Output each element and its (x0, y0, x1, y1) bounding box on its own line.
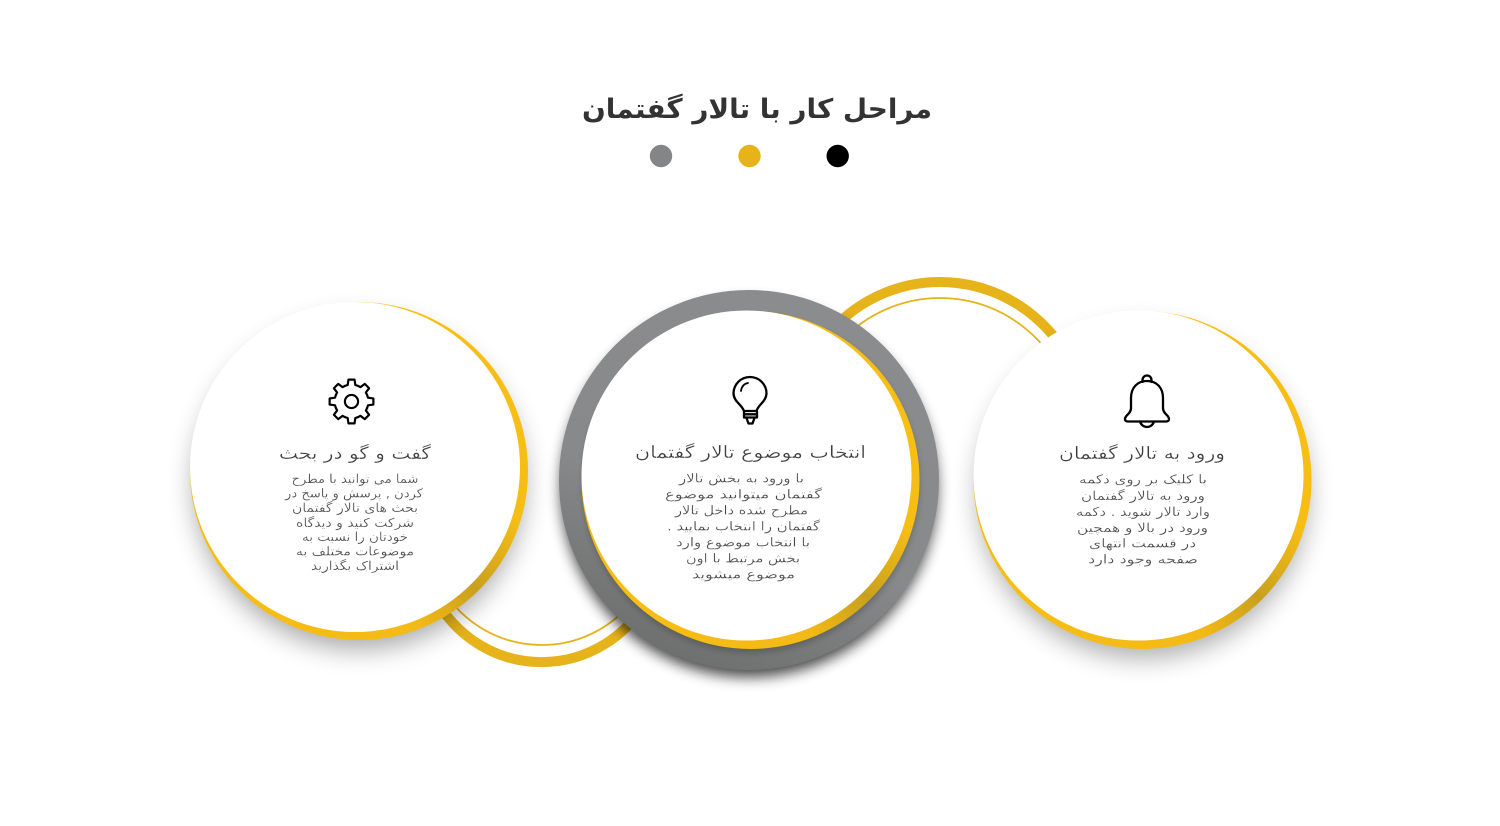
text block: enter (1076, 472, 1210, 568)
text block: enter: با کلیک بر روی دکمه (1079, 472, 1207, 488)
icon: gear (330, 380, 373, 423)
text block: enter: ورود در بالا و همچین (1077, 520, 1208, 536)
heading: enter: ورود به تالار گفتمان (1059, 443, 1225, 464)
arc: top connector (830, 282, 1070, 371)
heading: discuss: گفت و گو در بحث (279, 443, 432, 464)
text block: enter: در قسمت انتهای (1089, 536, 1196, 552)
text block: discuss: کردن , پرسش و پاسخ در (284, 486, 423, 502)
text block: topic: موضوع میشوید (692, 566, 795, 582)
text block: topic: گفتمان میتوانید موضوع (665, 486, 822, 502)
legend dots (650, 145, 849, 167)
panel: discuss step (190, 302, 528, 649)
text block: discuss: شما می توانید با مطرح (292, 471, 418, 487)
panel: topic step (559, 290, 939, 677)
icon: light bulb (734, 377, 766, 424)
text block: enter: صفحه وجود دارد (1088, 552, 1198, 568)
icon: bell (1125, 376, 1169, 427)
text block: discuss: اشتراک بگذارید (311, 558, 399, 574)
text block: topic: گفتمان را انتخاب نمایید . (667, 518, 820, 534)
text block: discuss: بحث های تالار گفتمان (292, 500, 418, 516)
title: مراحل کار با تالار گفتمان (582, 93, 932, 125)
text block: discuss: خودتان را نسبت به (302, 529, 408, 545)
text block: topic (665, 470, 822, 582)
text block: enter: ورود به تالار گفتمان (1081, 488, 1205, 504)
arc: bottom connector (430, 585, 650, 662)
heading: topic: انتخاب موضوع تالار گفتمان (635, 442, 866, 463)
text block: topic: بخش مرتبط با اون (686, 550, 800, 566)
text block: topic: با ورود به بخش تالار (678, 470, 804, 486)
text block: discuss (284, 471, 423, 574)
text block: discuss: موضوعات مختلف به (296, 544, 414, 560)
text block: discuss: شرکت کنید و دیدگاه (296, 515, 414, 531)
text block: topic: با انتخاب موضوع وارد (676, 534, 810, 550)
text block: topic: مطرح شده داخل تالار (674, 502, 808, 518)
panel: enter step (974, 310, 1312, 658)
text block: enter: وارد تالار شوید . دکمه (1076, 504, 1210, 520)
